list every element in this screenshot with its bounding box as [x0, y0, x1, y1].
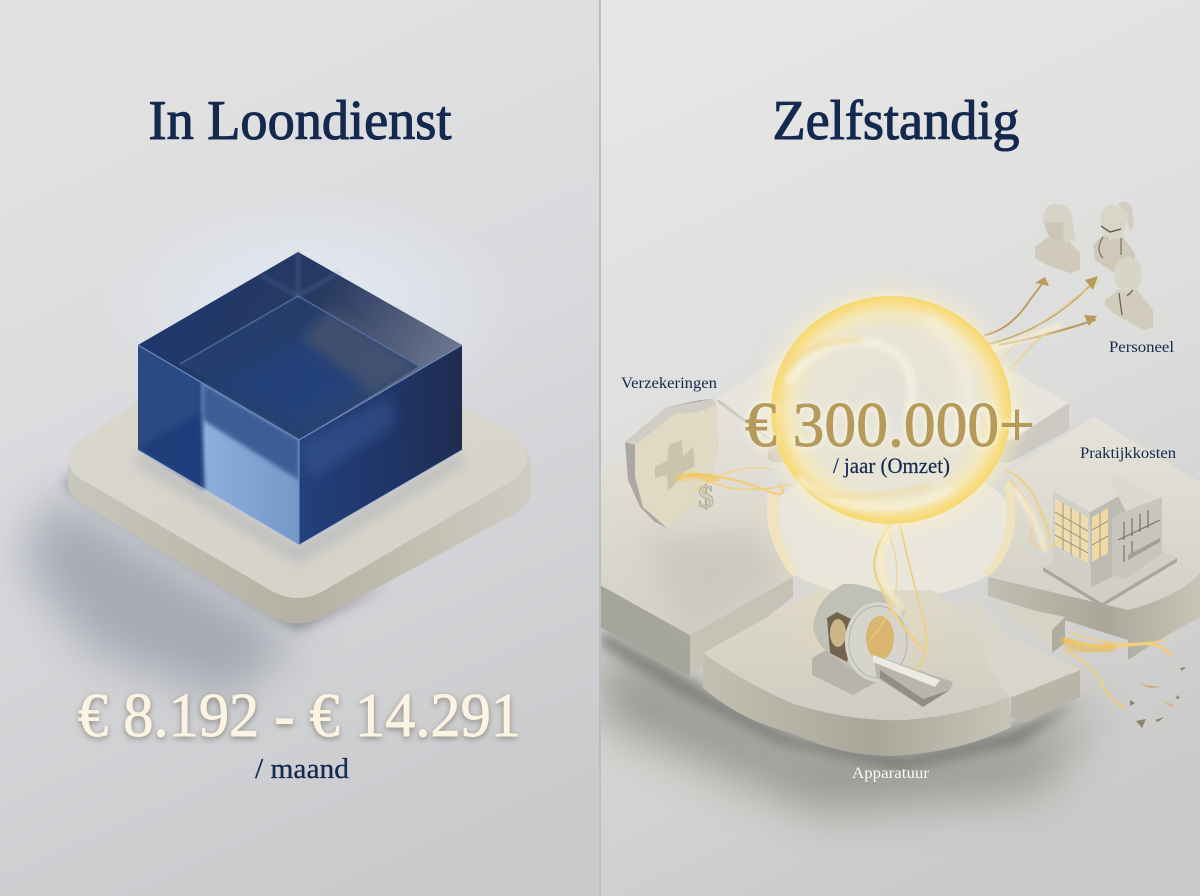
figure: woman: [1035, 204, 1080, 273]
icon: revenue sphere: [762, 290, 1018, 536]
platform: top slab: [717, 377, 1069, 462]
heading: Zelfstandig: Zelfstandig: [772, 90, 1020, 152]
platform: small fragment: [1004, 605, 1065, 653]
icon: Personeel figures: [1035, 202, 1153, 330]
glyph: dollar sign on shield: $: [698, 478, 714, 514]
label: Verzekeringen: Verzekeringen: [621, 375, 717, 392]
panel: Zelfstandig: [600, 0, 1200, 896]
icon: beige base plate: [68, 402, 531, 624]
figure: man: [1105, 257, 1153, 330]
icon: translucent blue cube: [138, 252, 462, 545]
figure: doctor: [1093, 202, 1135, 272]
icon: Verzekeringen shield: [625, 399, 718, 528]
divider: [599, 0, 601, 896]
caption: jaar omzet: / jaar (Omzet): [833, 453, 950, 478]
label: Praktijkkosten: Praktijkkosten: [1080, 445, 1176, 462]
platform: right slab: [984, 417, 1200, 660]
figure: monthly salary: € 8.192 - € 14.291: [78, 682, 521, 750]
figure: annual revenue: € 300.000+: [745, 389, 1035, 460]
platform: cracked fragment: [956, 598, 1080, 723]
panel: In Loondienst: [0, 0, 600, 896]
platform: hole floor: [778, 483, 1015, 594]
icon: arrows to staff: [1035, 276, 1098, 326]
heading: In Loondienst: In Loondienst: [148, 90, 452, 152]
icon: debris: [1130, 667, 1186, 728]
icon: golden flows from sphere: [680, 280, 1170, 707]
icon: Praktijkkosten building: [1043, 492, 1177, 605]
label: Personeel: Personeel: [1109, 339, 1175, 356]
icon: Apparatuur MRI scanner: [812, 584, 953, 707]
platform: left slab: [600, 402, 798, 677]
caption: per maand: / maand: [255, 754, 349, 785]
label: Apparatuur: Apparatuur: [852, 765, 930, 782]
platform: bottom slab: [703, 590, 1011, 756]
